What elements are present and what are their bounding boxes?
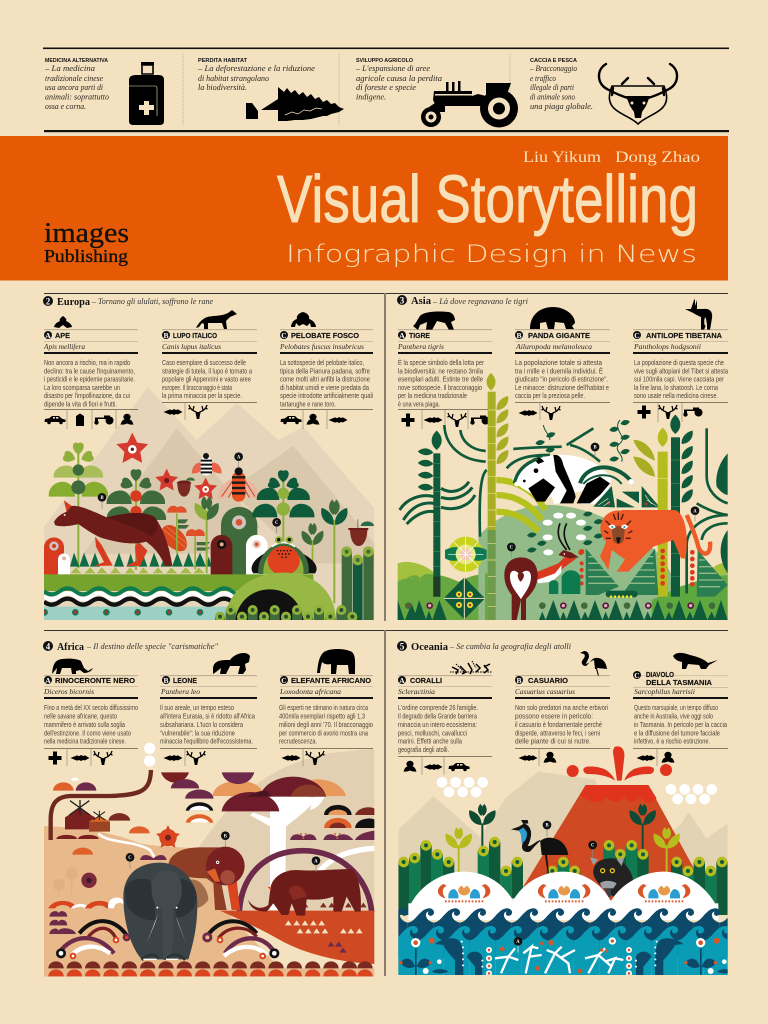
species: ape: Non ancora a rischio, ma in rapido (44, 358, 130, 367)
species: rinoceronte nero: nelle savane africane, questo (44, 712, 117, 720)
species: tigre: la biodiversità: ne restano 3mila (398, 366, 483, 375)
species: leone: “vulnerabile”: la sua riduzione (160, 728, 235, 737)
map markers (98, 452, 281, 534)
species: tigre: per la medicina tradizionale (398, 391, 467, 400)
vine lower (527, 511, 604, 553)
species: rinoceronte nero (43, 659, 138, 766)
threat: alternative medicine text: ossa e corna. (45, 102, 86, 111)
red berries (579, 549, 695, 587)
map markers: C (128, 856, 132, 861)
species: lupo italico: popolare gli Appennini e vasto aree (162, 375, 251, 384)
vine leaves (535, 419, 728, 573)
map markers: B (545, 824, 549, 829)
heading: Oceania (397, 641, 571, 653)
bee: striped small (192, 453, 222, 475)
species: rinoceronte nero: RINOCERONTE NERO (55, 676, 135, 685)
logs: tall right (336, 546, 374, 620)
corals (495, 947, 623, 973)
species: casuario: il casuario è fondamentale perché (515, 720, 602, 729)
species: coralli: L'ordine comprende 26 famiglie. (398, 703, 478, 712)
species: leone: Panthera leo (160, 687, 200, 696)
threat: agricultural development text (355, 58, 442, 102)
publisher logo: images (44, 218, 129, 249)
species: elefante africano (279, 649, 373, 766)
publisher logo (44, 218, 129, 266)
heading: Europa (43, 296, 213, 308)
species: coralli: minaccia un intero ecosistema: (398, 720, 477, 729)
threat: hunting and fishing text: illegale di parti (530, 83, 575, 92)
species: pelobate fosco: di habitat umidi e viene predata da (280, 383, 369, 392)
panel: Oceania text (397, 641, 728, 775)
wave row: navy (382, 908, 746, 958)
species: elefante africano: C (281, 676, 287, 685)
fan ends left (56, 933, 131, 959)
species: casuario: CASUARIO (528, 676, 568, 685)
threat: alternative medicine text: MEDICINA ALTERNATIVA (45, 58, 108, 64)
heading: Oceania: Oceania (411, 641, 448, 653)
mountains (398, 772, 728, 907)
species: antilope tibetana (633, 299, 728, 422)
species: antilope tibetana: vive sugli altopiani del Tibet si attesta (634, 366, 728, 375)
threat: alternative medicine text: tradizionale cinese (45, 74, 103, 83)
antelope (504, 523, 584, 620)
species: antilope tibetana: la fine lana, lo shatoosh. Le corna (634, 383, 718, 392)
species: diavolo della tasmania: e la diffusione del tumore facciale (634, 728, 720, 737)
flowers (53, 825, 180, 897)
map markers: B (224, 834, 227, 839)
map markers: B (100, 496, 104, 501)
subtitle: Infographic Design in News (286, 240, 697, 268)
ground (44, 574, 313, 591)
species: panda gigante: La popolazione totale si attesta (515, 358, 602, 367)
white seeds (543, 513, 586, 555)
species: elefante africano: Loxodonta africana (279, 687, 341, 696)
bamboo logs (398, 842, 728, 915)
species: elefante africano: Gli esperti ne stimano in natura circa (279, 703, 368, 712)
white arc and maroon arc (239, 848, 374, 912)
species: tigre: nove sottospecie. Il bracconaggio (398, 383, 482, 392)
species: tigre (397, 311, 492, 429)
plant: centre flowers (167, 496, 224, 573)
map markers: C (591, 844, 595, 849)
species: rinoceronte nero: dell'estinzione. Il corno viene usato (44, 728, 131, 737)
species: ape: APE (55, 331, 70, 340)
species: casuario: Non solo predatori ma anche erbivori (515, 703, 608, 712)
species: pelobate fosco (279, 312, 373, 429)
species: leone: B (163, 676, 169, 685)
species: tigre: Panthera tigris (397, 342, 444, 351)
wolf (54, 501, 187, 566)
threat: habitat loss text: PERDITA HABITAT (198, 58, 248, 64)
heading: Asia (397, 295, 528, 307)
species: diavolo della tasmania: DELLA TASMANIA (646, 678, 713, 687)
panel: Africa illustration (44, 743, 374, 977)
species: coralli: marini. Effetti anche sulla (398, 737, 462, 746)
bamboo: tall olive (486, 373, 512, 620)
plant: right dark clover (252, 470, 314, 547)
species: elefante africano: recrudescenza. (279, 737, 317, 746)
species: rinoceronte nero: A (45, 676, 51, 685)
species: lupo italico: europee. Il bracconaggio è stata (162, 383, 232, 392)
species: ape: dipende la vita di fiori e frutti. (44, 400, 117, 408)
species: lupo italico: LUPO ITALICO (173, 331, 217, 340)
species: panda gigante: giudicato "in pericolo di estinzione". (515, 375, 608, 384)
hill (225, 573, 336, 620)
map markers: C (510, 546, 514, 551)
olive fronds (496, 480, 545, 532)
fan ends right (202, 932, 279, 959)
threat: agricultural development text: indigene. (356, 92, 386, 102)
species: pelobate fosco: specie introdotte artificialmente quali (280, 391, 373, 400)
species: antilope tibetana: Pantholops hodgsonii (633, 342, 701, 351)
threat: alternative medicine text: – La medicina (44, 64, 95, 73)
striped firs (586, 548, 728, 597)
rainbow fans left (60, 921, 127, 955)
map markers (126, 831, 320, 872)
panda vine fan (514, 459, 634, 486)
threat: habitat loss text: – La deforestazione e la riduzione (197, 64, 315, 73)
small maroon triangles (328, 942, 347, 953)
threat: habitat loss text: la biodiversità. (198, 83, 247, 92)
species: diavolo della tasmania: Sarcophilus harrisii (634, 687, 695, 696)
species: tigre: è una vera piaga. (398, 400, 440, 408)
panda (512, 455, 612, 504)
scale rows bottom (48, 961, 373, 968)
species: tigre: È la specie simbolo della lotta per (398, 358, 484, 367)
white clouds (71, 743, 155, 781)
panel: threats strip (43, 48, 729, 132)
leaf tiles (593, 486, 660, 507)
species: lupo italico: Canis lupus italicus (162, 342, 221, 351)
species: casuario: delle piante di cui si nutre. (515, 737, 591, 746)
species: diavolo della tasmania: DIAVOLO (646, 670, 674, 679)
plants: leaf pairs right (302, 500, 348, 604)
heading: Asia: Asia (411, 295, 431, 307)
species: antilope tibetana: sui 100mila capi. Viene cacciata per (634, 375, 724, 384)
heading: Africa: 4 (46, 642, 51, 652)
species: ape: i pesticidi e le epidemie parassitarie. (44, 375, 135, 384)
rhino (248, 869, 361, 916)
bee: large (218, 467, 259, 502)
panel: Asia text (397, 295, 728, 429)
heading: Asia: – Là dove regnavano le tigri (432, 297, 528, 306)
species: panda gigante: tra i mille e i duemila individui. È (515, 366, 603, 375)
species: lupo italico: B (163, 331, 169, 340)
heading: Africa: Africa (57, 641, 84, 653)
plants olive (441, 827, 684, 873)
foreground buds (405, 602, 715, 609)
species: lupo italico: Caso esemplare di successo delle (162, 358, 246, 367)
threat: habitat loss text: di habitat strangolano (198, 74, 269, 83)
species: pelobate fosco: La sottospecie del pelobate italico, (280, 358, 364, 367)
map markers: B (593, 446, 597, 451)
icon: medicine bottle (129, 62, 164, 125)
map markers: C (275, 521, 279, 526)
species: tigre: TIGRE (409, 331, 430, 340)
plant: left clover (49, 443, 108, 568)
species: lupo italico: strategie di tutela, il lupo è tornato a (162, 366, 252, 375)
heading: Africa: – Il destino delle specie "carismatiche" (86, 642, 219, 651)
map markers: A (314, 859, 318, 864)
species: pelobate fosco: tipica della Pianura padana, soffre (280, 366, 370, 375)
species: diavolo della tasmania: anche in Australia, vive oggi solo (634, 712, 713, 720)
plant: red-centred clover (107, 469, 166, 570)
authors: Liu Yikum (523, 149, 601, 166)
arches (44, 507, 268, 575)
bamboo: right dark (670, 415, 696, 597)
log tops (398, 837, 727, 876)
species: panda gigante: Le minacce: distruzione dell'habitat e (515, 383, 609, 392)
drops (41, 609, 203, 616)
panel: Africa text (43, 641, 373, 766)
horizon triangles (293, 903, 367, 907)
wave row: teal sea (392, 926, 730, 975)
tasmanian devil (590, 857, 633, 897)
species: panda gigante (515, 307, 610, 420)
species: rinoceronte nero: nella medicina tradizionale cinese. (44, 737, 126, 746)
threat: hunting and fishing text: e traffico (530, 74, 556, 83)
authors: Dong Zhao (615, 149, 700, 166)
baobab canopy (222, 777, 346, 811)
panel: Asia illustration (398, 373, 728, 620)
species: leone: minaccia l'equilibrio dell'ecossistema. (160, 737, 253, 746)
volcano (523, 746, 697, 900)
species: coralli: Il degrado della Grande barriera (398, 712, 477, 720)
hills (398, 505, 728, 620)
species: diavolo della tasmania: infettivo, è a rischio estinzione. (634, 737, 710, 746)
species: pelobate fosco: Pelobates fuscus insubricus (279, 342, 364, 351)
acorn (177, 478, 195, 497)
species: ape (43, 316, 138, 429)
grass (70, 553, 212, 567)
toad (252, 536, 317, 575)
species: rinoceronte nero: mammifero è arrivato sulla soglia (44, 720, 125, 729)
acorn right (348, 519, 374, 546)
species: coralli: pesci, molluschi, cavallucci (398, 728, 467, 737)
species: leone: all'intera Eurasia, si è ridotto all'Africa (160, 712, 255, 720)
species: ape: disastro per l'impollinazione, da cui (44, 391, 130, 400)
heading: Africa (43, 641, 219, 653)
sand backdrop (44, 748, 374, 977)
species: tigre: A (399, 331, 405, 340)
species: pelobate fosco: PELOBATE FOSCO (291, 331, 359, 340)
species: rinoceronte nero: Diceros bicornis (43, 687, 94, 696)
publisher logo: Publishing (44, 246, 128, 266)
white hills (408, 872, 718, 920)
cassowary (511, 820, 568, 873)
threat: alternative medicine text: animali: soprattutto (45, 92, 109, 102)
threat: agricultural development text: – L'espansione di aree (355, 64, 430, 73)
lion (168, 847, 245, 910)
species: leone (160, 653, 257, 766)
species: pelobate fosco: tartarughe e rane toro. (280, 400, 336, 408)
species: coralli (398, 661, 492, 775)
species: antilope tibetana: La popolazione di questa specie che (634, 358, 724, 367)
species: leone: LEONE (173, 676, 197, 685)
tiger (600, 510, 710, 572)
threat: alternative medicine text (44, 58, 109, 111)
rainbow fans right (207, 921, 275, 956)
species: diavolo della tasmania: C (634, 671, 640, 680)
map markers (514, 821, 597, 953)
river (51, 770, 156, 860)
threat: hunting and fishing text: di animale sono (530, 92, 575, 102)
species: ape: declino: tra le cause l'inquinamento, (44, 366, 135, 375)
species: elefante africano: ELEFANTE AFRICANO (291, 676, 371, 685)
small trees (402, 567, 424, 582)
species: antilope tibetana: sono usate nella medicina cinese. (634, 391, 718, 400)
left fronds (400, 482, 475, 524)
boat motifs (438, 884, 690, 901)
species: tigre: esemplari adulti. Estinte tre delle (398, 375, 483, 384)
threat: habitat loss text (197, 58, 315, 92)
domes right (290, 805, 374, 840)
species: diavolo della tasmania: in Tasmania. In pericolo per la caccia (634, 720, 727, 729)
panel: Europa illustration (41, 387, 374, 633)
canopy domes top (161, 772, 264, 823)
seahorses (435, 938, 683, 975)
species: ape: Apis mellifera (43, 342, 85, 351)
species: antilope tibetana: ANTILOPE TIBETANA (646, 331, 723, 340)
species: panda gigante: PANDA GIGANTE (528, 331, 590, 340)
species: antilope tibetana: C (634, 331, 640, 340)
diamond motif (444, 577, 485, 619)
map markers (507, 443, 699, 558)
heading: Oceania: – Se cambia la geografia degli atolli (449, 642, 571, 651)
panel: Europa text (43, 296, 373, 429)
heading: Europa: 2 (46, 296, 51, 306)
icon: tractor (421, 81, 518, 128)
bamboo: left dark (417, 431, 442, 597)
threat: hunting and fishing text: CACCIA E PESCA (530, 58, 577, 64)
species: diavolo della tasmania (633, 653, 728, 766)
icon: bulldozer and felled tree (246, 87, 344, 121)
dark red plain (220, 911, 374, 964)
threat: alternative medicine text: usa ancora parti di (45, 83, 104, 92)
species: rinoceronte nero: Fino a metà del XX secolo diffusissimo (44, 703, 138, 712)
map markers: A (237, 455, 241, 460)
domes left (53, 782, 150, 855)
threat: hunting and fishing text: una piaga globale. (530, 102, 593, 111)
species: diavolo della tasmania: Questo marsupiale, un tempo diffuso (634, 703, 718, 712)
map markers: A (693, 509, 697, 514)
species: pelobate fosco: C (281, 331, 287, 340)
huts (65, 800, 110, 832)
species: coralli: geografia degli atolli. (398, 745, 449, 754)
species: elefante africano: milioni degli anni ’70. Il bracconaggio (279, 720, 373, 729)
species: lupo italico: la prima minaccia per la specie. (162, 391, 242, 400)
baobab trunk (250, 797, 325, 910)
species: coralli: CORALLI (410, 676, 442, 685)
heading: Europa: – Tornano gli ululati, soffrono le rane (91, 297, 213, 306)
species: coralli: Scleractinia (398, 687, 435, 696)
logs (214, 605, 336, 620)
species: elefante africano: 400mila esemplari rispetto agli 1,3 (279, 712, 365, 720)
threat: hunting and fishing text (529, 58, 593, 111)
elephant (123, 863, 197, 960)
species: panda gigante: B (516, 331, 522, 340)
vines (444, 425, 728, 593)
threat: hunting and fishing text: – Bracconaggio (529, 64, 577, 73)
threat: agricultural development text: SVILUPPO AGRICOLO (356, 58, 413, 64)
species: coralli: A (399, 676, 405, 685)
sea plants (399, 938, 733, 975)
species: pelobate fosco: come molti altri anfibi la distruzione (280, 375, 370, 384)
grass foreground (398, 600, 728, 620)
species: casuario (515, 651, 610, 766)
river waves (44, 588, 238, 620)
heading: Europa: Europa (57, 296, 90, 308)
species: panda gigante: caccia per la preziosa pelle. (515, 391, 585, 400)
species: panda gigante: Ailuropoda melanoleuca (515, 342, 592, 351)
threat: agricultural development text: agricole causa la perdita (356, 74, 442, 83)
species: leone: Il suo areale, un tempo esteso (160, 703, 234, 712)
species: ape: La loro scomparsa sarebbe un (44, 383, 120, 392)
species: leone: subsahariana. L'Iucn lo considera (160, 720, 243, 729)
panel: title banner (0, 136, 728, 280)
authors (523, 149, 700, 166)
map markers: A (516, 940, 520, 945)
species: casuario: possono essere in pericolo: (515, 712, 593, 720)
plants dark (465, 804, 660, 853)
bamboo: right olive (633, 428, 668, 597)
flower (445, 537, 487, 572)
species: casuario: B (516, 676, 522, 685)
threat: agricultural development text: di foreste e specie (356, 83, 416, 92)
species: casuario: disperde, attraverso le feci, i semi (515, 728, 600, 737)
species: elefante africano: per commercio di avorio mostra una (279, 728, 368, 737)
heading: Oceania: 5 (400, 642, 405, 652)
icon: deer skull shield (599, 64, 677, 124)
coral dots (486, 937, 632, 976)
species: ape: A (45, 331, 51, 340)
heading: Asia: 3 (400, 296, 405, 306)
side decorative motifs (48, 855, 167, 934)
flowers: red stars (116, 433, 217, 499)
cloud circles (437, 777, 717, 804)
arches (549, 570, 638, 598)
species: casuario: Casuarius casuarius (515, 687, 575, 696)
panel: Oceania illustration (382, 746, 746, 976)
species: lupo italico (162, 310, 257, 420)
white triangle rows (285, 920, 363, 933)
